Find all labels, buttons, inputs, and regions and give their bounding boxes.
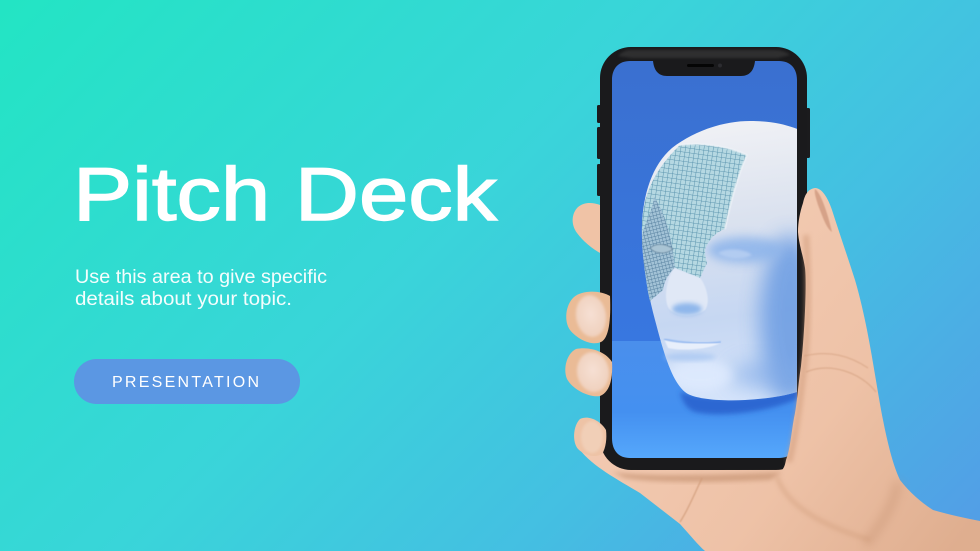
3D head (642, 121, 797, 400)
knuckle creases (806, 368, 876, 392)
nose (666, 268, 708, 316)
lower palm crease (680, 478, 702, 522)
subtitle text block: details about your topic. (75, 289, 292, 310)
head shadow (680, 388, 800, 414)
phone bezel highlight (618, 50, 790, 58)
smartphone (597, 47, 820, 470)
lips (664, 339, 722, 361)
subtitle text block (75, 267, 327, 310)
phone side buttons (597, 105, 810, 196)
finger two (565, 348, 612, 396)
face mesh panel (642, 144, 747, 301)
hand in front of phone: thumb and fingers (565, 188, 980, 551)
screen floor (612, 341, 797, 459)
left eye (650, 244, 673, 253)
right eye (718, 249, 752, 259)
presentation button: PRESENTATION (112, 374, 259, 391)
subtitle text block: Use this area to give specific (75, 267, 327, 288)
thumb and wrist (760, 188, 980, 551)
palm crease (777, 477, 870, 540)
finger three (574, 418, 606, 456)
phone screen (612, 61, 797, 458)
presentation button (74, 359, 300, 404)
finger one (566, 292, 610, 343)
thumb nail edge (815, 189, 832, 232)
phone body (600, 47, 807, 470)
thumb inner shading (789, 235, 808, 462)
shadow below phone (612, 472, 782, 482)
phone notch speaker (687, 64, 722, 68)
wrist crease (866, 482, 898, 545)
title: Pitch Deck (73, 152, 498, 236)
hand behind phone: palm and index finger (573, 203, 800, 551)
screen backdrop (612, 61, 797, 342)
